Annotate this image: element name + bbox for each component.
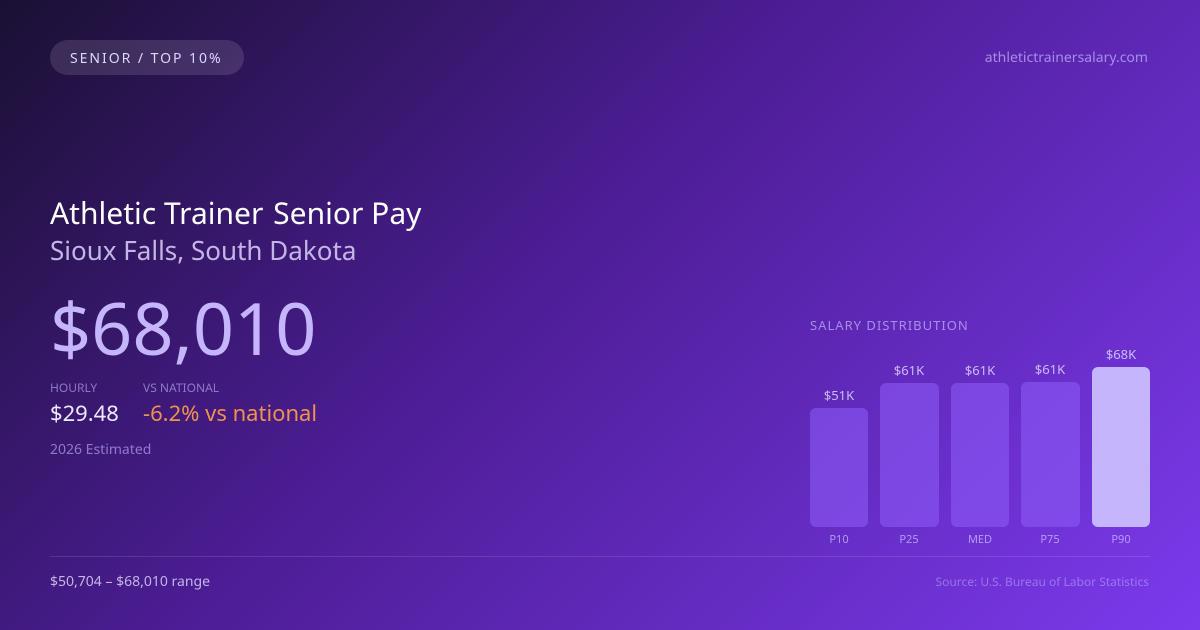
bar: MED [951,361,1009,547]
title: Athletic Trainer Senior Pay [50,192,421,233]
chart heading: SALARY DISTRIBUTION [810,316,969,334]
stat: vs national [143,379,317,428]
bar: P10 [810,386,868,547]
stat: vs national: -6.2% vs national [143,398,317,428]
site url: athletictrainersalary.com [985,48,1148,67]
location subtitle: Sioux Falls, South Dakota [50,232,356,268]
badge: senior / top 10% [50,40,244,75]
bar: P75 [1021,360,1080,547]
bar: P90 [1092,345,1150,547]
badge: senior / top 10%: SENIOR / TOP 10% [70,49,223,68]
bar: P25: P25 [899,532,919,547]
chart: salary distribution [810,316,1150,547]
bar: P10: P10 [829,532,849,547]
stat: vs national: VS NATIONAL [143,379,219,396]
bar: P25: $61K [894,361,924,379]
bar: MED: $61K [965,361,995,379]
source: Source: U.S. Bureau of Labor Statistics [936,573,1149,590]
stat: hourly [50,379,119,428]
bar: MED: MED [968,532,992,547]
stat: hourly: HOURLY [50,379,97,396]
bar: P75: $61K [1035,360,1065,378]
bar: P25 [880,361,939,547]
bar: P90: P90 [1111,532,1131,547]
bar: P10: $51K [824,386,854,404]
stat: hourly: $29.48 [50,398,119,428]
salary range: $50,704 – $68,010 range [50,572,210,591]
year note: 2026 Estimated [50,440,151,459]
salary amount: $68,010 [50,279,316,377]
bar: P90: $68K [1106,345,1136,363]
bar: P75: P75 [1040,532,1060,547]
